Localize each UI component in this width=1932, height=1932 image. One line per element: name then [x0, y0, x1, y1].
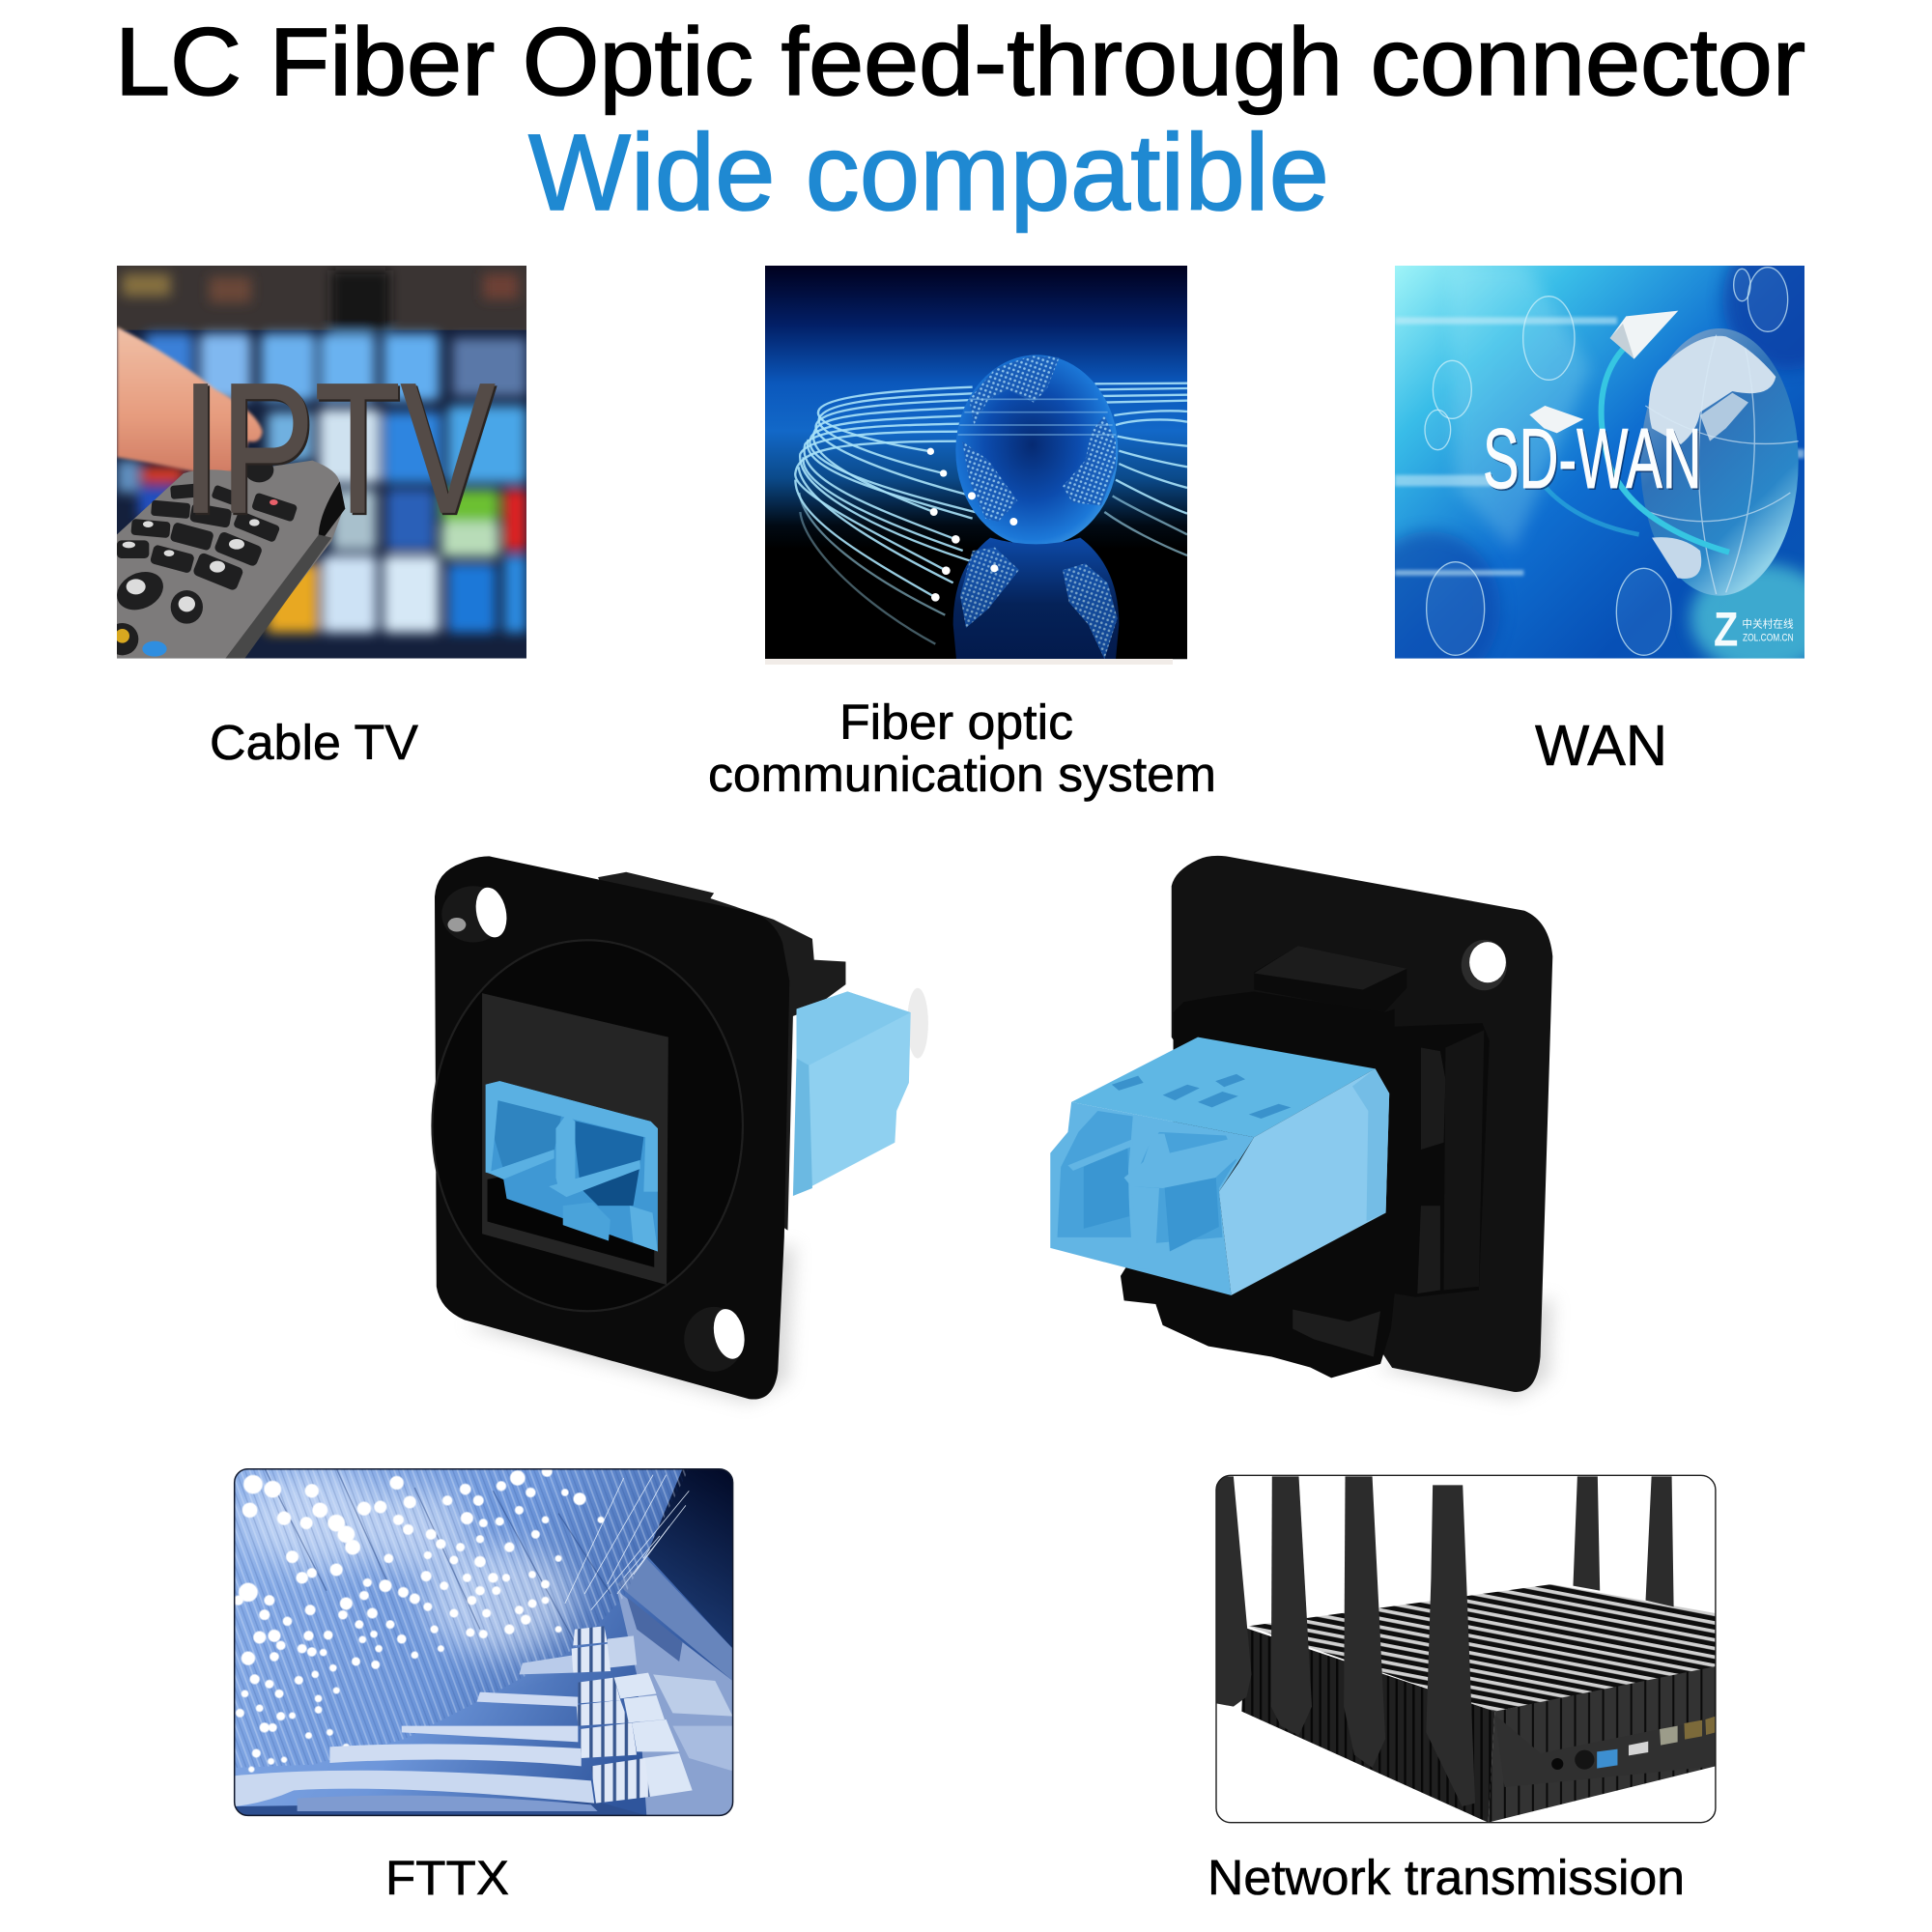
fiber end lights — [927, 448, 1017, 602]
SD-WAN wordmark — [1485, 428, 1699, 491]
router ports — [1551, 1717, 1716, 1770]
SD-WAN wordmark: SD-WAN — [1485, 412, 1703, 508]
fiber light dots — [235, 1470, 605, 1774]
finger — [117, 327, 263, 476]
label: Fiber optic communication system: communication system — [708, 747, 1216, 802]
label: Cable TV: Cable TV — [210, 715, 418, 770]
fiber glow — [242, 1471, 575, 1655]
paper planes — [1529, 311, 1678, 433]
panel: fiber globe image — [765, 266, 1187, 659]
mounting plate — [435, 856, 789, 1400]
product: connector front view — [432, 856, 928, 1403]
round flange — [432, 940, 743, 1311]
IPTV wordmark — [193, 384, 497, 516]
blue adapter — [1050, 1037, 1389, 1295]
rear housing — [598, 872, 845, 1231]
black frame — [1121, 991, 1490, 1378]
panel: IPTV image — [106, 266, 526, 659]
patch cables — [235, 1655, 646, 1815]
light bars — [1395, 317, 1804, 576]
router body — [1241, 1584, 1716, 1823]
mounting hole — [1462, 940, 1507, 990]
fiber strands — [235, 1469, 689, 1768]
dark corner — [646, 1469, 733, 1649]
IPTV wordmark: IPTV — [183, 346, 497, 554]
wan globe — [1640, 328, 1799, 596]
logo: ZOL.COM.CN — [1743, 633, 1794, 644]
globe — [955, 355, 1118, 547]
top latch — [1254, 946, 1406, 1012]
switch ports — [617, 1591, 733, 1815]
antennas — [1216, 1476, 1674, 1806]
label: Network transmission: Network transmission — [1208, 1850, 1685, 1905]
logo: Z — [1714, 602, 1738, 656]
subtitle: Wide compatible — [528, 112, 1329, 233]
cyan swirl — [1539, 350, 1729, 553]
bubbles — [1425, 268, 1788, 655]
product: connector rear view — [1050, 856, 1552, 1399]
label: Fiber optic communication system — [708, 695, 1216, 802]
logo: 中关村在线 — [1742, 617, 1794, 630]
RJ45 plugs — [572, 1626, 693, 1804]
rear blue adapter — [793, 991, 911, 1196]
SD-WAN wordmark: SD-WAN — [1483, 411, 1702, 506]
globe reflection — [953, 538, 1119, 659]
mounting hole top — [441, 885, 511, 942]
mounting plate — [1172, 856, 1552, 1392]
IPTV wordmark: IPTV — [181, 344, 495, 552]
panel: router image — [1216, 1475, 1716, 1823]
title: LC Fiber Optic feed-through connector — [115, 8, 1805, 115]
label: Fiber optic communication system: Fiber optic — [839, 695, 1073, 750]
blue duplex port — [486, 1081, 658, 1251]
logo — [1715, 612, 1793, 645]
panel: FTTX image — [234, 1466, 733, 1815]
remote control — [106, 458, 345, 659]
mounting hole bottom — [684, 1306, 749, 1372]
fiber arcs — [795, 384, 1187, 644]
inner square — [482, 993, 668, 1285]
strip under fiber image — [765, 659, 1173, 665]
label: WAN: WAN — [1535, 714, 1667, 778]
label: FTTX: FTTX — [385, 1851, 509, 1905]
panel: SD-WAN image — [1395, 266, 1804, 659]
